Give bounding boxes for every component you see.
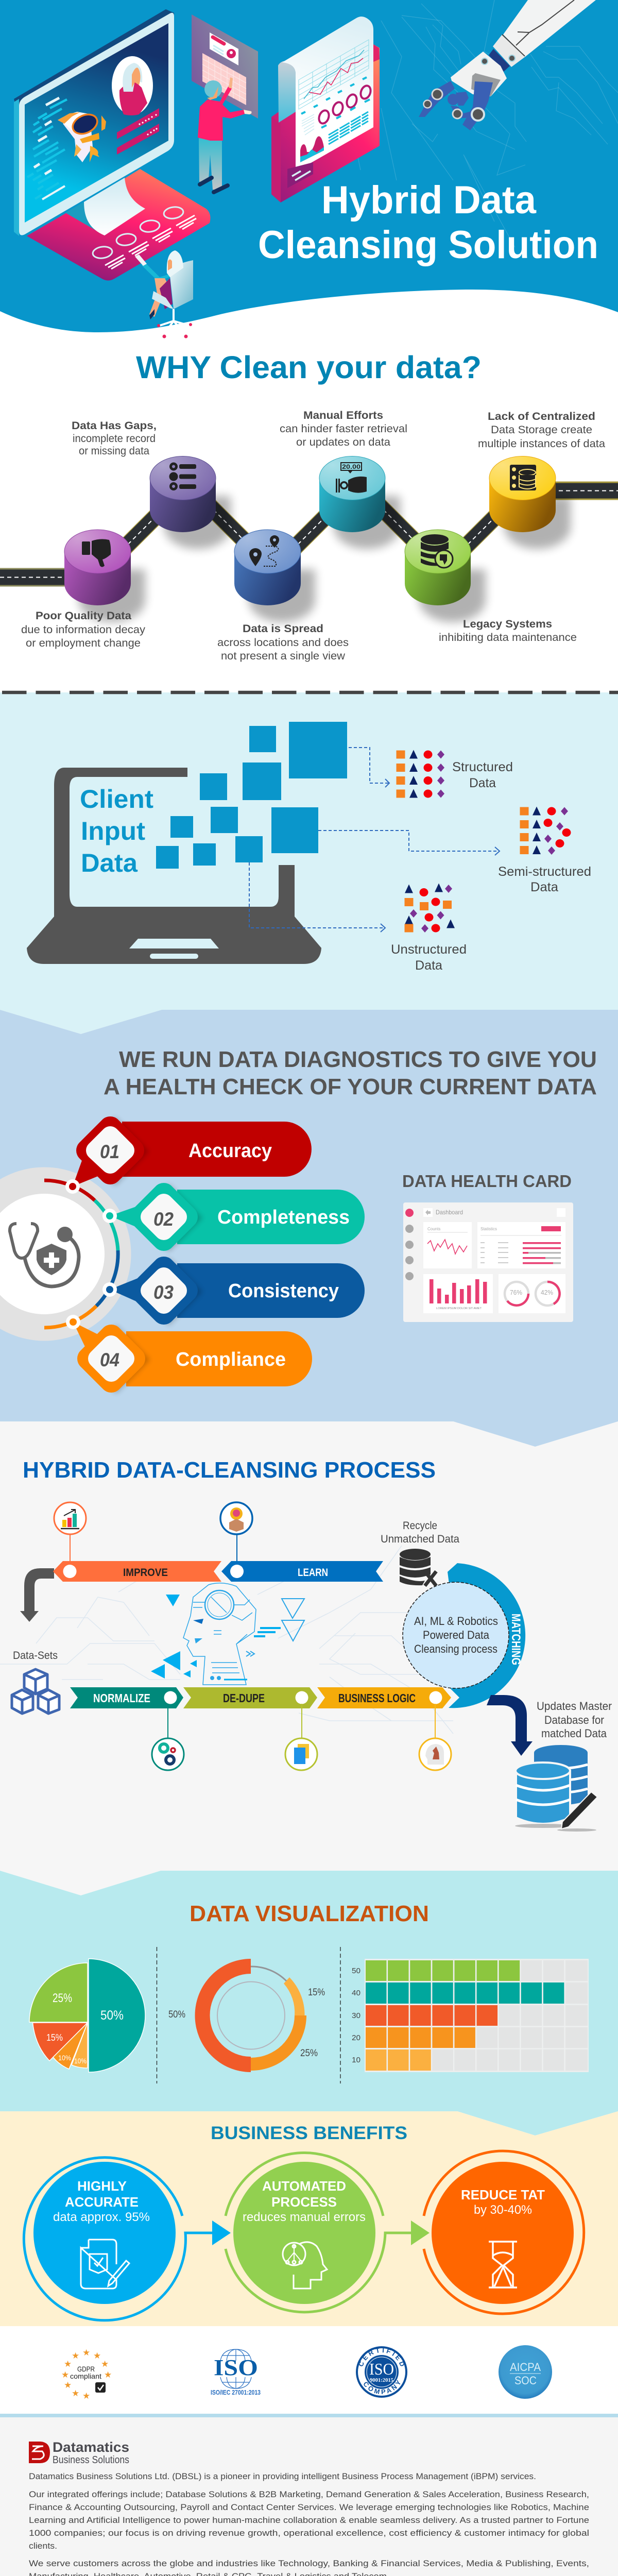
ai circle [403, 1582, 509, 1688]
icon: improve bubble [54, 1502, 86, 1566]
badge: gdpr: ★ [72, 2351, 79, 2361]
icon: wristwatch timer: 20.00 [342, 463, 360, 470]
row 30 [366, 2005, 498, 2026]
icon: ai head [183, 1583, 256, 1685]
title [258, 178, 598, 267]
line chart [299, 40, 369, 109]
labels: roadmap text: Legacy Systems [463, 618, 552, 630]
panel: footer [0, 2417, 618, 2576]
pill: accuracy: Accuracy [188, 1140, 272, 1162]
icon: server database [510, 465, 536, 490]
index finger [419, 81, 455, 117]
icon: report document [271, 16, 380, 202]
circuit pattern [350, 0, 618, 247]
bar labels [352, 1967, 360, 2064]
ribbon: improve: IMPROVE [123, 1567, 168, 1579]
badge: iso 9001: 9001:2015 [370, 2377, 393, 2383]
client input data text: Input [81, 817, 145, 845]
benefit: highly accurate: ACCURATE [65, 2194, 139, 2210]
ribbon: de-dupe [183, 1687, 317, 1708]
circuit pattern [0, 1546, 453, 1734]
section background [0, 692, 618, 1034]
dashboard card: Counts [427, 1227, 440, 1231]
dashboard card: 42% [541, 1289, 553, 1296]
labels: roadmap text: not present a single view [221, 650, 346, 662]
ribbon: learn [221, 1561, 383, 1582]
badge: gdpr [61, 2348, 112, 2401]
panel: hybrid process [0, 1421, 618, 1895]
ribbon: de-dupe: DE-DUPE [223, 1691, 265, 1705]
pink bar chart [430, 1279, 487, 1303]
icon: thumb down [82, 539, 111, 567]
icon: man at data wall [192, 14, 258, 192]
data blocks [156, 722, 347, 869]
section background [0, 2111, 618, 2326]
data type labels: Structured [452, 760, 513, 774]
benefit: reduce tat: by 30-40% [474, 2203, 532, 2217]
donut labels [168, 1987, 325, 2059]
footer strip [0, 2414, 618, 2417]
badge: iso 9001: CERTIFIED [359, 2348, 404, 2366]
area chart [300, 136, 324, 162]
data type labels: Data [415, 958, 442, 973]
badge: gdpr: ★ [104, 2370, 112, 2380]
company description: Our integrated offerings include; Database Solutions & B2B Marketing, Demand Generation & Sales Acceleration, Business Research, [29, 2489, 589, 2499]
donut labels: 15% [308, 1987, 325, 1998]
screen code lines [27, 99, 67, 199]
column dividers [157, 1947, 340, 2083]
logo wordmark: Business Solutions [53, 2454, 129, 2466]
bar labels: 40 [352, 1989, 360, 1997]
pill: accuracy: 01 [100, 1141, 119, 1162]
pill: completeness: 02 [153, 1209, 174, 1230]
semi-structured shapes [520, 807, 571, 855]
icon: cubes [12, 1669, 59, 1714]
benefit: automated process: AUTOMATED [262, 2178, 346, 2194]
astronaut [58, 111, 106, 162]
diagnostics heading [104, 1047, 597, 1099]
middle fingers [448, 94, 459, 105]
figure [199, 138, 222, 190]
cylinder: gaps [150, 456, 231, 549]
bar labels: 30 [352, 2011, 360, 2020]
company description: Datamatics Business Solutions Ltd. (DBSL) is a pioneer in providing intelligent Business Process Management (iBPM) services. [29, 2471, 536, 2481]
title: Cleansing Solution [258, 223, 598, 267]
labels: roadmap text: Poor Quality Data [36, 610, 131, 622]
data health card heading: DATA HEALTH CARD [402, 1172, 572, 1191]
pie labels [46, 1991, 124, 2065]
badge: aicpa soc: AICPA [510, 2361, 541, 2374]
icon: head network [283, 2242, 327, 2289]
monitor bezel [19, 13, 174, 235]
ribbon: normalize: NORMALIZE [93, 1691, 150, 1705]
cylinder: manual [319, 456, 400, 549]
badge: gdpr: ★ [101, 2359, 109, 2369]
thumb [462, 81, 493, 130]
paper fold [278, 61, 296, 123]
dashboard card [403, 1202, 573, 1322]
icon: database thumb [421, 534, 453, 568]
badge: gdpr: ★ [61, 2370, 69, 2380]
row 20 [366, 2027, 475, 2048]
pie labels: 25% [53, 1991, 72, 2005]
icon: hourglass [489, 2242, 517, 2287]
row 10 [366, 2049, 431, 2071]
hero blue wave background [0, 0, 618, 332]
matching arc: MATCHING [509, 1614, 523, 1665]
data type labels: Unstructured [391, 942, 467, 957]
badge: gdpr: ★ [64, 2380, 72, 2390]
row 50 [366, 1960, 520, 1981]
hero banner [0, 0, 618, 338]
process heading: HYBRID DATA-CLEANSING PROCESS [23, 1458, 436, 1483]
badge: iso 9001: ISO [369, 2360, 394, 2378]
monitor back edge [14, 9, 174, 121]
screen input bars [117, 108, 159, 155]
labels: roadmap text: Lack of Centralized [488, 411, 595, 422]
pen [561, 1792, 597, 1829]
bar grid [365, 1959, 589, 2072]
panel: client input data [0, 692, 618, 1034]
paper sheet [282, 16, 373, 172]
icon: business logic bubble [419, 1704, 451, 1770]
benefit: reduce tat: REDUCE TAT [461, 2187, 545, 2202]
icon: normalize bubble [152, 1704, 184, 1770]
monitor screen [25, 23, 168, 223]
chart labels [301, 77, 370, 144]
ai circle: Cleansing process [414, 1642, 497, 1655]
heading: why clean: WHY Clean your data? [136, 350, 482, 385]
badge: iso 27001: ISO [214, 2355, 258, 2380]
matching arc [448, 1563, 525, 1708]
badge: iso 27001 [211, 2349, 261, 2396]
labels: roadmap text: Data Storage create [491, 424, 592, 436]
data type labels: Data [469, 776, 496, 790]
pill: consistency: Consistency [228, 1280, 339, 1302]
bar labels: 20 [352, 2033, 360, 2042]
hair [167, 250, 183, 277]
ai circle: Powered Data [423, 1629, 490, 1641]
panel: business benefits [0, 2111, 618, 2326]
badge: gdpr: ★ [64, 2359, 72, 2369]
pink grid [202, 53, 246, 105]
phone [135, 255, 147, 266]
updates label [537, 1700, 612, 1740]
pocket back [271, 44, 380, 202]
recycle label [381, 1520, 459, 1545]
panel: data visualization [0, 1871, 618, 2136]
row 40 [366, 1982, 564, 2004]
touchpad [129, 939, 219, 948]
icon: learn bubble [220, 1502, 252, 1566]
cylinder: centralized [489, 456, 571, 549]
ribbon: learn: LEARN [298, 1567, 328, 1579]
sidebar icons [405, 1209, 414, 1217]
labels: roadmap text: incomplete record [73, 433, 156, 445]
ribbon: business logic [317, 1687, 451, 1708]
arrow: to structured [349, 748, 389, 787]
base stats [92, 206, 184, 260]
data type labels [391, 760, 591, 973]
updates label: Database for [544, 1714, 604, 1726]
labels: roadmap text: Data Has Gaps, [72, 420, 157, 432]
donut labels: 50% [168, 2009, 185, 2020]
data-sets label: Data-Sets [13, 1650, 58, 1662]
pocket tab [287, 162, 313, 188]
benefit: automated process: reduces manual errors [243, 2210, 366, 2224]
dashboard card: Dashboard [436, 1209, 463, 1216]
ai circle: AI, ML & Robotics [414, 1615, 498, 1628]
bar labels: 10 [352, 2056, 360, 2064]
badge: iso 9001: COMPANY [364, 2380, 401, 2394]
monitor stand [65, 202, 105, 235]
updates label: matched Data [541, 1727, 607, 1740]
badge: iso 27001: ISO/IEC 27001:2013 [211, 2388, 261, 2396]
panel: data diagnostics [0, 1010, 618, 1447]
wrist [489, 49, 510, 72]
icon: de-dupe bubble [285, 1704, 317, 1770]
labels: roadmap text: or missing data [79, 445, 149, 457]
chair base [160, 309, 190, 335]
labels: roadmap text: Manual Efforts [303, 410, 383, 421]
company description: 1000 companies; our focus is on driving revenue growth, operational excellence, cost efficiency & customer intimacy for global [29, 2528, 589, 2538]
pie labels: 50% [100, 2008, 124, 2023]
icon: master database [515, 1745, 597, 1832]
recycle label: Unmatched Data [381, 1533, 459, 1545]
benefit: reduce tat [424, 2151, 584, 2314]
diagnostics heading: WE RUN DATA DIAGNOSTICS TO GIVE YOU [119, 1047, 597, 1072]
client input data text: Client [80, 785, 153, 814]
pie labels: 15% [46, 2032, 63, 2043]
donut labels: 25% [300, 2048, 318, 2059]
benefit: highly accurate: data approx. 95% [53, 2210, 150, 2224]
company description [29, 2471, 589, 2576]
updates label: Updates Master [537, 1700, 612, 1713]
pill: completeness [102, 1184, 365, 1252]
donut chart [195, 1959, 306, 2072]
ribbon: improve [53, 1561, 221, 1582]
chart donuts [317, 84, 372, 125]
footer background [0, 2417, 618, 2576]
visualization heading: DATA VISUALIZATION [190, 1901, 429, 1926]
pill: compliance: Compliance [176, 1349, 286, 1370]
labels: roadmap text: inhibiting data maintenance [439, 632, 577, 643]
labels: roadmap text: can hinder faster retrieval [280, 423, 407, 435]
forearm [503, 0, 596, 57]
logo mark [29, 2442, 50, 2463]
dashboard card: LOREM IPSUM DOLOR SIT AMET [436, 1307, 482, 1310]
cuff [493, 35, 525, 67]
labels: roadmap text [21, 410, 605, 662]
badge: gdpr: ★ [93, 2351, 101, 2361]
woman on chair [135, 250, 193, 338]
pie chart [29, 1959, 145, 2072]
diagnostics heading: A HEALTH CHECK OF YOUR CURRENT DATA [104, 1074, 597, 1099]
badge: aicpa soc: SOC [514, 2374, 537, 2387]
panel: roadmap [0, 456, 618, 622]
section background [0, 1010, 618, 1447]
arrow: to semi-structured [318, 831, 500, 855]
pill: consistency: 03 [153, 1282, 174, 1303]
profile oval [112, 56, 153, 115]
unstructured shapes [405, 883, 455, 933]
recycle label: Recycle [403, 1520, 437, 1532]
pie labels: 10% [74, 2057, 87, 2065]
labels: roadmap text: multiple instances of data [478, 438, 605, 450]
status bars [480, 1242, 561, 1264]
dashed divider [2, 691, 618, 694]
badge: gdpr: ★ [72, 2388, 79, 2398]
logo wordmark [53, 2439, 129, 2466]
title: Hybrid Data [321, 178, 537, 222]
pill: accuracy [65, 1117, 312, 1194]
icon: database x [400, 1549, 436, 1586]
benefit: highly accurate [24, 2158, 231, 2320]
icon: stethoscope [10, 1224, 79, 1286]
badge: aicpa soc [499, 2345, 552, 2399]
dashboard card: 76% [510, 1289, 522, 1296]
labels: roadmap text: or updates on data [296, 436, 390, 448]
pill: completeness: Completeness [217, 1207, 350, 1228]
wall panel [192, 14, 258, 118]
company description: Finance & Accounting Outsourcing, Payroll and Contact Center Services. We leverage emerging technologies like Robotics, Machine [29, 2502, 589, 2512]
labels: roadmap text: due to information decay [21, 624, 146, 636]
ribbon: normalize [70, 1687, 183, 1708]
client input data text: Data [81, 849, 138, 877]
badge: gdpr: ★ [82, 2348, 90, 2358]
structured data shapes [397, 750, 444, 798]
arrow: to master database [487, 1695, 533, 1756]
company description: Learning and Artificial Intelligence to power human-machine collaboration & enable seamless delivery. As a trusted partner to Fortune [29, 2515, 589, 2525]
arm [142, 263, 173, 282]
pill: compliance: 04 [100, 1349, 119, 1370]
ribbon: business logic: BUSINESS LOGIC [338, 1691, 416, 1705]
pill: consistency [102, 1258, 365, 1326]
data type labels: Semi-structured [498, 865, 591, 879]
icon: list [169, 463, 196, 490]
legs [149, 278, 170, 317]
bar labels: 50 [352, 1967, 360, 1975]
laptop [27, 768, 321, 964]
cylinder: poor quality [64, 530, 145, 622]
data type labels: Data [530, 880, 558, 894]
icon: monitor [14, 9, 210, 280]
section background [0, 1421, 618, 1895]
arrow: improve to data-sets [20, 1568, 54, 1622]
company description: clients. [29, 2541, 57, 2551]
badge: gdpr: compliant [70, 2372, 101, 2380]
labels: roadmap text: Data is Spread [243, 623, 323, 635]
palm [451, 52, 507, 96]
benefit: highly accurate: HIGHLY [77, 2178, 127, 2194]
icon: document check [81, 2240, 129, 2289]
labels: roadmap text: or employment change [26, 637, 141, 649]
benefit: automated process [226, 2153, 430, 2312]
section background [0, 1871, 618, 2136]
gauge donuts [505, 1282, 560, 1306]
benefits heading: BUSINESS BENEFITS [211, 2123, 407, 2143]
road [0, 479, 618, 577]
icon: wristwatch timer [336, 463, 367, 493]
triangles [151, 1595, 304, 1679]
logo wordmark: Datamatics [53, 2439, 129, 2455]
arrow: to unstructured [249, 862, 385, 932]
icon: map pins [249, 535, 279, 566]
pill: compliance [66, 1315, 312, 1394]
labels: roadmap text: across locations and does [217, 637, 349, 649]
badge: iso 9001 [356, 2346, 407, 2398]
badge: gdpr: GDPR [77, 2365, 95, 2373]
benefit: automated process: PROCESS [271, 2194, 337, 2210]
cylinder: spread [234, 530, 315, 622]
icon: robot hand [419, 0, 596, 130]
dashboard card: Statistics [480, 1227, 497, 1231]
profile card [210, 32, 238, 65]
client input data text [80, 785, 153, 877]
pie labels: 10% [58, 2054, 71, 2062]
company description: We serve customers across the globe and industries like Technology, Banking & Financial Services, Media & Publishing, Events, [29, 2558, 589, 2568]
squiggle chart [427, 1240, 467, 1254]
cylinder: legacy [405, 530, 486, 622]
badge: gdpr: ★ [82, 2391, 90, 2401]
monitor base [27, 169, 210, 280]
chair back [169, 260, 193, 309]
health ring [0, 1167, 131, 1341]
